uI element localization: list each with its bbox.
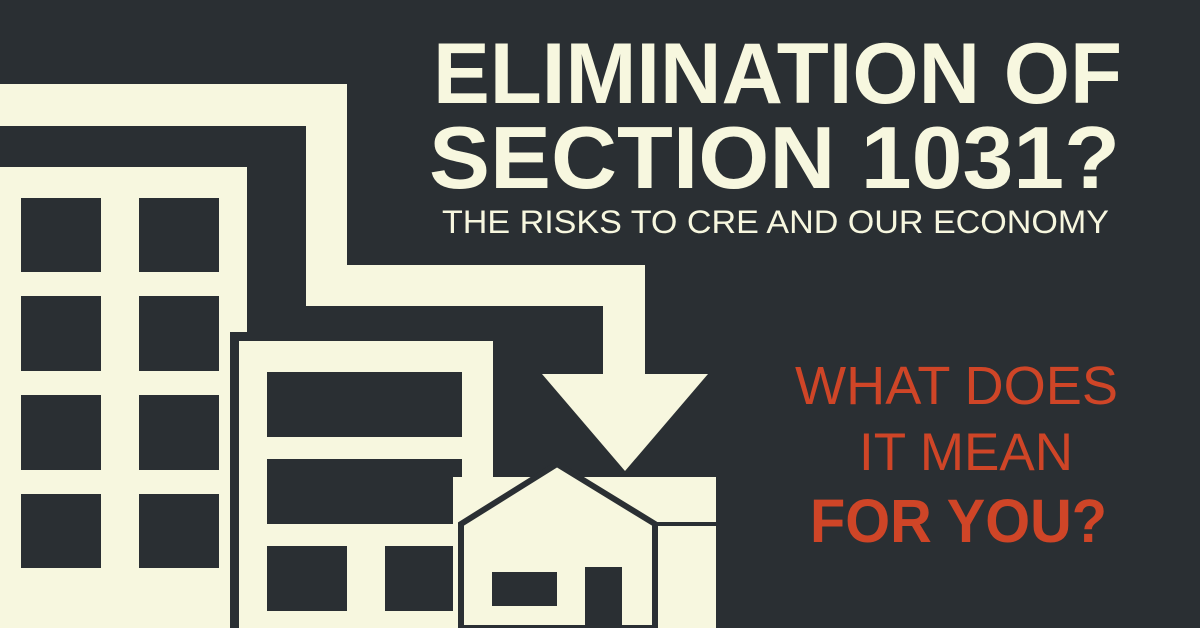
callout: what does it mean for you: [795, 356, 1118, 555]
arrow: downward path band: [0, 84, 708, 471]
callout: what does it mean for you: FOR YOU?: [810, 487, 1107, 555]
title: [429, 26, 1122, 207]
callout: what does it mean for you: IT MEAN: [859, 423, 1073, 482]
callout: what does it mean for you: WHAT DOES: [795, 356, 1118, 416]
subtitle: THE RISKS TO CRE AND OUR ECONOMY: [442, 204, 1109, 240]
icon: house: [461, 464, 716, 628]
title: SECTION 1031?: [429, 108, 1120, 207]
title: ELIMINATION OF: [433, 26, 1122, 122]
building: tall tower left: [0, 167, 247, 628]
building: back wall behind house: [453, 477, 716, 628]
building: middle block: [230, 332, 502, 628]
